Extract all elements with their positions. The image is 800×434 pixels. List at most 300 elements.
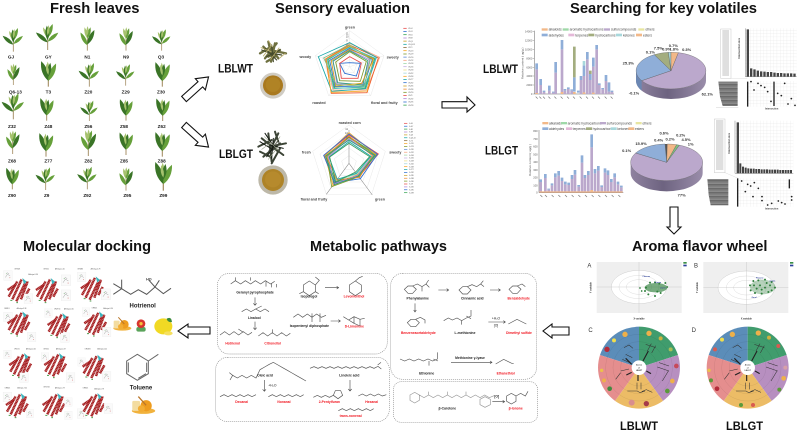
leaf GY: GY [45,55,53,60]
legend: LBLWT radar: W-Z85 [408,86,413,88]
proteins row 1: Affinity=-5.36 [28,273,38,276]
legend: LBLGT radar: G-Z30 [409,149,414,151]
legend: LBLWT radar: W-Z29 [408,54,413,56]
legend: LBLWT radar: W-Z68 [408,76,413,78]
leaf Z58: Z58 [120,124,128,129]
chart: LBLWT flavor wheel: Aroma [636,364,643,367]
legend: LBLGT radar: G-GY [409,126,414,128]
legend: LBLWT bar chart: aldehydes [549,33,564,37]
box: terpenoid pathways: Linalool [248,316,261,320]
molecule: Hotrienol [113,277,171,294]
box: carotenoid pathway: β-Carotene [439,406,456,410]
proteins row 4: OR8D1 [5,387,10,389]
chart: LBLGT bar chart: 700 [533,137,538,141]
legend: LBLWT radar: W-N1 [408,34,413,36]
proteins row 3: Affinity=-6.37 [56,348,66,351]
legend: LBLWT bar chart: terpenes [575,33,589,37]
chart: LBLGT radar: 10 [345,131,349,135]
legend: LBLWT bar chart: esters [643,33,652,37]
proteins row 2: OR8D1 [92,307,97,309]
legend: LBLWT bar chart: aromatic hydrocarbons [570,28,604,32]
box: terpenoid pathways: Geranyl pyrophosphate [236,291,274,295]
leaf Z32 [0,93,25,129]
leaf Z9: Z9 [44,193,50,198]
legend: LBLWT radar [403,28,415,107]
molecule: Hotrienol: HO [146,277,152,281]
panel: key volatiles [520,28,797,210]
chart: LBLWT bar chart: Relative content ( ug/g ) [520,47,524,79]
chart: LBLGT bar chart: 800 [533,129,538,133]
chart: LBLGT radar [301,121,402,202]
panel: aroma flavor wheel [587,262,793,409]
proteins row 3: OR1G1 [43,349,49,351]
leaf Q3 [151,29,171,60]
legend: LBLGT radar: G-Z77 [409,169,414,171]
proteins row 3 [4,348,111,382]
leaf Z82: Z82 [84,158,93,163]
leaf Z62: Z62 [158,124,166,129]
box: terpenoid pathways: Hotrienol [225,341,240,345]
leaf Z56: Z56 [84,124,93,129]
box: fatty acid pathways [216,357,389,422]
legend: LBLGT bar chart: esters [635,127,644,131]
chart: LBLGT pie: 77% [678,192,686,197]
leaf Z99: Z99 [159,193,168,198]
label: LBLGT wheel: LBLGT [726,421,763,433]
proteins row 3: OR2M3 [85,349,90,351]
chart: LBLWT upset plot: Intersection size [737,37,741,59]
leaf Z56 [79,100,99,129]
proteins row 1: OR1G1 [43,268,49,270]
chart: LBLGT bar chart: 500 [533,152,538,156]
legend: LBLGT radar: G-Z90 [409,181,414,183]
legend: LBLWT bar chart: others [645,28,655,32]
legend: LBLWT bar chart: alkaloids [549,28,562,32]
chart: LBLWT pie: 1.8% [669,46,679,51]
legend: LBLWT radar: W-Z90 [408,92,413,94]
chart: LBLGT radar: floral and fruity [301,198,328,202]
panel: sensory evaluation [258,26,416,202]
chart: LBLWT pie: 62.1% [702,92,713,97]
label: Toluene: Toluene [130,385,153,391]
label: LBLWT wheel: LBLWT [620,421,658,433]
proteins row 4: OR2T34 [43,387,50,389]
box: carotenoid pathway [393,382,538,422]
legend: LBLGT radar: G-Z82 [409,172,414,174]
chart: LBLGT pie [622,131,703,197]
legend: LBLGT bar chart [542,121,652,131]
chart: LBLWT radar: 9 [346,39,348,43]
legend: LBLWT radar: W-Z30 [408,57,413,59]
arrow: leaves to LBLGT [179,119,214,153]
chart: LBLGT pie: 0.6% [659,131,669,136]
chart: LBLGT radar: 11 [345,127,349,131]
panel: amino acid and carotenoid pathways [391,273,538,422]
chart: LBLWT bar chart: 2000 [526,83,533,87]
chart: loading plot A: Flavone [643,276,651,278]
panel: molecular docking [3,267,173,420]
chart: LBLWT pie: 0.3% [682,47,692,52]
chart: LBLWT pie: 7.5% [654,46,663,51]
icon: green tea dry leaves [258,132,286,163]
leaf Z68: Z68 [8,158,16,163]
leaf Z20 [77,62,100,94]
legend: LBLGT bar chart: others [642,121,652,125]
legend: LBLGT bar chart: ketones [617,127,629,131]
chart: LBLWT upset plot [716,28,797,111]
leaf Q6-13 [6,64,22,94]
label: LBLGT volatiles: LBLGT [485,146,518,158]
chart: LBLWT radar: 8 [346,43,348,47]
chart: LBLGT bar chart: 400 [533,160,538,164]
chart: LBLWT pie: 0.7% [669,43,678,48]
legend: LBLGT radar: G-Z68 [409,166,414,168]
chart: LBLWT radar: 10 [346,35,349,39]
proteins row 4: Affinity=-7.02 [17,386,27,389]
proteins row 2: OR8D1 [4,308,10,310]
proteins row 4 [3,386,113,420]
legend: LBLWT radar: W-T3 [408,47,412,49]
legend: LBLWT radar: W-Z77 [408,79,413,81]
box: amino acid pathways [391,273,537,379]
chart: LBLWT pie: 25.3% [623,61,634,66]
icons on wheel C [600,331,679,406]
legend: LBLGT bar chart: sulfurcompounds [607,121,632,125]
box: terpenoid pathways: Citronellol [264,341,281,345]
legend: LBLWT radar: W-Z62 [408,73,413,75]
leaf GJ: GJ [8,55,15,60]
proteins row 2: Affinity=-5.34 [103,307,113,310]
legend: LBLWT radar: W-Z82 [408,82,413,84]
chart: LBLWT flavor wheel: LBLWT [636,370,643,372]
box: amino acid pathways: +H₂O [492,317,501,321]
proteins row 2: Affinity=-6.05 [64,308,74,311]
leaf Z90 [4,167,21,198]
chart: LBLGT radar: 9 [346,135,348,139]
chart: LBLGT bar chart: Relative content ( ug/g ) [528,144,532,176]
proteins row 2: Affinity=-5.38 [17,307,26,310]
chart: loading plot A: A [587,263,591,269]
box: carotenoid pathway: [O] [494,395,499,399]
chart: LBLGT radar: fresh [302,151,311,155]
leaf T3: T3 [46,89,51,94]
label: C: C [588,328,593,334]
legend: LBLGT bar chart: aromatic hydrocarbons [568,121,602,125]
box: amino acid pathways: Benzeneacetaldehyde [401,331,436,335]
chart: loading plot A: X variable [633,319,645,321]
title: Molecular docking: Molecular docking [23,239,151,255]
proteins row 2: OR2T34 [54,309,60,311]
chart: LBLGT bar chart: 100 [533,183,538,187]
chart: LBLWT bar chart: 14000 [525,30,533,34]
chart: LBLGT upset plot [707,119,793,210]
chart: LBLWT radar [299,26,400,105]
chart: LBLGT upset plot: Intersection [765,207,779,210]
chart: LBLGT pie: 0.4% [654,137,664,142]
legend: LBLGT radar: G-Z9 [409,184,413,186]
box: amino acid pathways: [O] [494,324,498,328]
panel: terpenoid and fatty acid pathways [216,273,389,422]
legend: LBLGT radar: G-Z58 [409,161,414,163]
chart: LBLGT flavor wheel: LBLGT [745,370,752,372]
legend: LBLWT bar chart: sulfurcompounds [611,28,637,32]
arrow: pathways to docking [178,324,210,338]
chart: loading plot A [587,262,687,321]
chart: loading plot A: Y variable [590,281,592,293]
chart: LBLGT bar chart: 600 [533,145,538,149]
box: fatty acid pathways: Hexanal [365,400,378,404]
chart: LBLGT pie: 4.5% [681,137,691,142]
leaf GJ [1,27,24,60]
chart: LBLGT radar: green [375,198,385,202]
legend: LBLGT radar: G-Z32 [409,152,414,154]
leaf Z29 [115,64,135,94]
title: Fresh leaves: Fresh leaves [50,1,140,17]
proteins row 3: Affinity=-6.42 [97,348,107,351]
box: amino acid pathways: Ethionine [419,371,434,375]
icon: white tea dry leaves [260,41,286,62]
legend: LBLGT radar: G-N1 [409,129,413,131]
chart: LBLGT bar chart: 0 [536,191,538,195]
leaf Z77: Z77 [44,158,53,163]
arrow: sensory to volatiles [442,97,475,112]
chart: LBLGT bar chart [528,129,623,197]
box: terpenoid pathways: Isopentenyl diphosphate [290,324,329,328]
box: amino acid pathways: Cinnamic acid [461,296,484,300]
leaf Z92 [76,166,98,198]
legend: LBLWT radar: W-Z48 [408,63,413,65]
chart: LBLWT bar chart: 12000 [525,39,533,43]
legend: LBLWT radar: W-Z20 [408,50,413,52]
molecule: Toluene [127,354,158,380]
chart: LBLWT radar: roasted [312,101,326,105]
chart: LBLWT bar chart: 0 [531,92,533,96]
leaf Z58 [118,98,134,129]
box: fatty acid pathways: Nonanal [277,400,291,404]
leaf Z48 [38,97,55,129]
legend: LBLWT radar: W-Z9 [408,95,412,97]
proteins row 1: Affinity=-5.20 [55,267,65,270]
chart: LBLWT radar: woody [299,55,312,59]
leaf Z32: Z32 [8,124,16,129]
proteins row 2 [4,307,113,342]
chart: LBLWT radar: 11 [346,31,349,35]
legend: LBLWT radar: W-Z99 [408,105,413,107]
leaf N1 [79,26,96,60]
legend: LBLGT radar: G-Q6-13 [409,137,416,139]
box: fatty acid pathways: trans-nonenal [340,414,362,418]
legend: LBLGT radar: G-Z85 [409,175,414,177]
legend: LBLGT radar: G-Z95 [409,189,414,191]
leaf Z92: Z92 [83,193,92,198]
box: fatty acid pathways: Oleic acid [257,373,273,377]
leaf N1: N1 [84,55,91,60]
box: terpenoid pathways: D-Limonene [345,324,364,328]
title: Metabolic pathways: Metabolic pathways [310,239,447,255]
box: amino acid pathways: Ethanethiol [497,371,515,375]
legend: LBLGT radar: G-Z62 [409,163,414,165]
icon: lemon [154,318,173,335]
leaf Z95: Z95 [123,193,132,198]
leaf Z29: Z29 [122,89,130,94]
icon: green tea cup [258,165,288,195]
leaf Z82 [79,129,98,163]
chart: loading plot B: floral [752,296,757,299]
leaf Z88: Z88 [158,158,166,163]
chart: LBLWT pie: -0.1% [629,91,640,96]
legend: LBLWT bar chart [542,28,655,37]
legend: LBLWT radar: W-Z32 [408,60,413,62]
icons on wheel D [707,330,787,407]
box: fatty acid pathways: Linoleic acid [339,373,359,377]
box: amino acid pathways: Dimethyl sulfide [506,331,532,335]
box: amino acid pathways: Benzaldehyde [507,296,530,300]
legend: LBLWT radar: W-Z95 [408,102,413,104]
icon: flower [136,319,146,332]
leaf Z30: Z30 [157,89,165,94]
box: fatty acid pathways: +H₂O [268,383,277,387]
leaf Z30 [153,61,172,94]
leaf Z90: Z90 [8,193,16,198]
legend: LBLWT radar: W-Z58 [408,70,413,72]
leaf Z77 [37,132,55,163]
leaf N9: N9 [123,55,129,60]
chart: LBLWT bar chart: 8000 [526,56,533,60]
leaf Z99 [152,161,175,198]
proteins row 4: Affinity=-5.79 [94,387,104,390]
legend: LBLGT radar: G-T3 [409,140,413,142]
proteins row 1 [4,267,111,303]
chart: LBLGT pie: 0.1% [622,148,632,153]
legend: LBLWT radar: W-Z92 [408,98,413,100]
chart: loading plot A: sweet [660,286,666,289]
chart: loading plot B: Y variable [697,281,699,293]
box: amino acid pathways: L-methionine [455,331,476,335]
legend: LBLGT bar chart: alkaloids [549,121,562,125]
legend: LBLGT radar: G-Z88 [409,178,414,180]
chart: LBLWT upset plot: Intersection [765,108,779,111]
title: Searching for key volatiles: Searching for key volatiles [570,1,757,17]
chart: LBLWT pie [623,43,713,99]
label: LBLWT sensory: LBLWT [218,64,253,76]
legend: LBLGT radar: G-GJ [409,123,413,125]
proteins row 3: Affinity=-6.06 [26,348,36,351]
chart: LBLGT pie: 15.9% [635,141,647,146]
label: LBLWT volatiles: LBLWT [483,64,518,76]
box: terpenoid pathways: Levomenthol [344,295,364,299]
legend: LBLWT radar: W-Z56 [408,66,413,68]
leaf Q3: Q3 [158,55,165,60]
box: terpenoid pathways [217,273,387,354]
proteins row 1: Affinity=-5.78 [91,267,100,270]
leaf T3 [39,60,58,94]
legend: LBLWT bar chart: ketones [623,33,635,37]
legend: LBLGT bar chart: aldehydes [549,127,565,131]
chart: LBLGT pie: 1% [688,142,694,147]
chart: loading plot B: B [694,263,698,269]
chart: loading plot A: aroma [655,281,662,284]
arrow: wheel to pathways [543,324,569,338]
chart: LBLWT bar chart [520,30,614,99]
box: fatty acid pathways: Decanal [235,400,248,404]
label: D: D [692,328,697,334]
legend: LBLGT radar: G-Z92 [409,187,414,189]
leaf Z95 [118,167,135,198]
chart: LBLGT radar: roasted corn [339,121,361,125]
legend: LBLGT bar chart: hydrocarbons [593,127,613,131]
chart: loading plot B: X variable [741,319,753,321]
legend: LBLWT radar: W-GY [408,31,414,33]
arrow: volatiles to flavor wheel [667,207,681,234]
chart: LBLWT pie: 0.1% [646,50,655,55]
chart: LBLWT pie: 0.9% [662,46,672,51]
chart: LBLGT upset plot: Intersection size [727,132,731,154]
icon: honey toluene [132,397,155,414]
chart: LBLGT flavor wheel [707,327,789,409]
chart: LBLGT bar chart: 200 [533,176,538,180]
leaf Z9 [34,167,56,198]
title: Aroma flavor wheel: Aroma flavor wheel [632,239,768,255]
chart: LBLWT flavor wheel [598,327,680,409]
leaf Q6-13: Q6-13 [9,89,22,94]
legend: LBLWT radar: W-Q3 [408,41,413,43]
legend: LBLGT radar: G-Z20 [409,143,414,145]
chart: LBLGT flavor wheel: Aroma [745,364,752,367]
leaf N9 [118,27,135,60]
legend: LBLWT bar chart: hydrocarbons [595,33,616,37]
chart: LBLGT bar chart: 300 [533,168,538,172]
legend: LBLWT radar: W-N9 [408,38,413,40]
proteins row 1: OR2W1 [14,268,20,270]
icon: honey [113,317,131,331]
arrow: leaves to LBLWT [179,71,214,105]
box: terpenoid pathways: Isopulegol [301,294,317,298]
legend: LBLGT radar: G-Z48 [409,155,414,157]
chart: LBLGT radar: sweety [389,151,402,155]
proteins row 4: OR8D1 [83,387,88,389]
title: Sensory evaluation: Sensory evaluation [275,1,410,17]
box: fatty acid pathways: 2-Pentylfuran [319,400,340,404]
box: amino acid pathways: Methionine γ-lyase [455,356,485,360]
chart: LBLWT radar: green [345,26,355,30]
proteins row 3: OR1G1 [14,349,20,351]
legend: LBLGT radar: G-Z29 [409,146,414,148]
legend: LBLGT radar: G-Z56 [409,158,414,160]
legend: LBLGT radar: G-Z99 [409,192,414,194]
chart: LBLWT radar: floral and fruity [371,101,399,105]
label: LBLGT sensory: LBLGT [219,149,253,161]
chart: LBLGT pie: 0.2% [676,132,686,137]
leaf GY [35,23,59,60]
box: amino acid pathways: Phenylalanine [406,296,429,300]
legend: LBLWT radar: W-GJ [408,28,413,30]
chart: LBLWT bar chart: 10000 [525,48,533,52]
chart: loading plot B: Flavone [756,278,764,280]
chart: loading plot B [694,262,793,321]
legend: LBLGT radar [404,123,416,194]
legend: LBLGT bar chart: terpenes [573,127,586,131]
box: carotenoid pathway: β-Ionone [509,406,523,410]
chart: LBLWT radar: sweety [387,55,400,59]
leaf Z62 [154,98,171,129]
proteins row 4: Affinity=-5.79 [55,386,65,389]
leaf Z48: Z48 [44,124,53,129]
chart: LBLWT bar chart: 6000 [526,65,533,69]
legend: LBLWT radar: W-Z88 [408,89,413,91]
leaf Z85: Z85 [120,158,128,163]
proteins row 1: OR2M3 [77,268,83,270]
legend: LBLGT radar: G-N9 [409,132,413,134]
